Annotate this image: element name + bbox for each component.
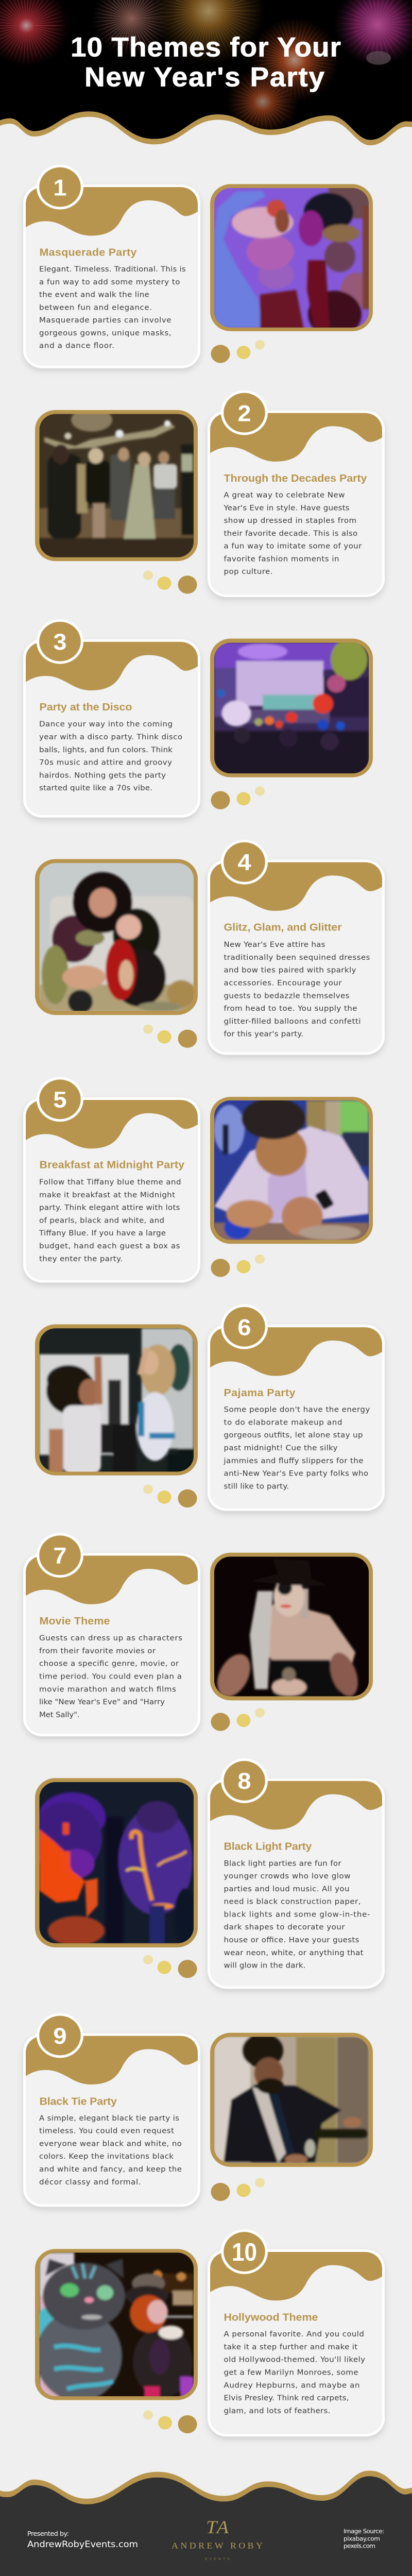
body text 9: colors. Keep the invitations black [39, 2153, 174, 2161]
body text 4: guests to bedazzle themselves [224, 992, 350, 1000]
body text 3: year with a disco party. Think disco [39, 733, 182, 741]
body text 10: glam, and lots of feathers. [224, 2406, 330, 2415]
body text 2: pop culture. [224, 567, 273, 576]
panel: theme 9 [23, 2013, 373, 2207]
body text 1: a fun way to add some mystery to [39, 278, 180, 286]
body text 8: wear neon, white, or anything that [224, 1948, 364, 1957]
number badge 5: 5 [53, 1087, 67, 1112]
number badge 2: 2 [237, 400, 251, 426]
photo: man pouring champagne [210, 2033, 373, 2167]
body text 8: will glow in the dark. [224, 1961, 306, 1970]
heading 8: Black Light Party [224, 1841, 312, 1853]
image source: pexels.com [344, 2543, 375, 2550]
body text 9: everyone wear black and white, no [39, 2140, 182, 2148]
heading 2: Through the Decades Party [224, 472, 367, 484]
heading 4: Glitz, Glam, and Glitter [224, 922, 341, 933]
footer [0, 2470, 412, 2576]
heading 10: Hollywood Theme [224, 2312, 318, 2323]
body text 2 [223, 491, 362, 576]
body text 7 [39, 1634, 182, 1719]
body text 8: dark shapes to decorate your [224, 1923, 345, 1931]
body text 1: Masquerade parties can involve [39, 316, 171, 325]
body text 1 [39, 265, 186, 350]
panel: theme 3 [23, 619, 373, 818]
title: 10 Themes for Your [71, 32, 341, 62]
number badge 4: 4 [237, 849, 251, 875]
body text 5: make it breakfast at the Midnight [39, 1191, 175, 1199]
card 9 [23, 2033, 200, 2207]
heading 6: Pajama Party [224, 1387, 296, 1399]
body text 10 [224, 2330, 365, 2415]
body text 2: favorite fashion moments in [224, 555, 339, 563]
body text 8: black lights and some glow-in-the- [224, 1910, 370, 1919]
body text 8: need is black construction paper, [224, 1897, 360, 1906]
card 7 [23, 1553, 200, 1736]
body text 7: choose a specific genre, movie, or [39, 1659, 179, 1668]
panel: theme 8 [30, 1758, 385, 1989]
card 5 [23, 1097, 200, 1283]
body text 6: gorgeous outfits, let alone stay up [224, 1431, 363, 1439]
body text 3: started quite like a 70s vibe. [39, 784, 152, 792]
logo: Andrew Roby Events [171, 2517, 263, 2561]
panel: theme 10 [35, 2229, 385, 2436]
icon: magenta firework [333, 0, 412, 67]
image source: Image Source: [344, 2528, 384, 2535]
heading 1: Masquerade Party [39, 247, 137, 258]
image source [344, 2528, 384, 2550]
panel: theme 7 [23, 1533, 373, 1736]
title [71, 32, 341, 92]
card 4 [208, 860, 385, 1055]
photo: disco stage [210, 639, 373, 777]
photo: cheshire cat and mad hatter [35, 2249, 198, 2401]
number badge 6 [221, 1304, 268, 1349]
body text 4 [224, 940, 370, 1039]
body text 7: time period. You could even plan a [39, 1672, 182, 1681]
body text 6: to do elaborate makeup and [224, 1418, 342, 1427]
card 3 [23, 639, 200, 818]
body text 3: balls, lights, and fun colors. Think [39, 745, 173, 754]
logo: Andrew Roby Events: TA [206, 2517, 229, 2538]
footer wave band [0, 2470, 412, 2576]
body text 3: 70s music and attire and groovy [39, 758, 172, 767]
body text 9: décor classy and formal. [39, 2178, 141, 2187]
panel: theme 6 [35, 1304, 385, 1511]
body text 4: accessories. Encourage your [224, 979, 342, 987]
photo: masquerade [210, 184, 373, 338]
body text 1: the event and walk the line [39, 291, 149, 299]
panel: theme 4 [35, 840, 385, 1055]
body text 1: Elegant. Timeless. Traditional. This is [39, 265, 186, 274]
body text 10: take it a step further and make it [224, 2343, 357, 2351]
body text 6: Some people don't have the energy [224, 1405, 370, 1414]
body text 1: gorgeous gowns, unique masks, [39, 329, 171, 337]
body text 5 [39, 1178, 181, 1263]
body text 6 [223, 1405, 370, 1490]
photo: dancing at the tent [35, 408, 198, 561]
card 2 [208, 411, 385, 597]
body text 7: from their favorite movies or [39, 1647, 156, 1655]
body text 6: jammies and fluffy slippers for the [223, 1456, 364, 1465]
body text 7: movie marathon and watch films [39, 1685, 176, 1693]
body text 6: anti-New Year's Eve party folks who [224, 1469, 368, 1478]
number badge 3 [37, 619, 83, 664]
body text 4: from head to toe. You supply the [224, 1004, 357, 1013]
logo: Andrew Roby Events: ANDREW ROBY [171, 2540, 263, 2551]
number badge 4 [221, 840, 268, 885]
heading 5: Breakfast at Midnight Party [39, 1159, 184, 1171]
photo: glitter friends [35, 859, 198, 1015]
dots 5 [211, 1255, 265, 1277]
dots 9 [211, 2178, 265, 2201]
body text 8: younger crowds who love glow [224, 1872, 351, 1880]
body text 10: Elvis Presley. Think red carpets, [224, 2394, 349, 2402]
body text 2: show up dressed in staples from [224, 516, 356, 525]
card 1 [23, 184, 200, 368]
dots 3 [211, 786, 265, 809]
panel: theme 2 [35, 391, 385, 597]
body text 1: and a dance floor. [39, 342, 114, 350]
number badge 7 [37, 1533, 83, 1578]
body text 5: Follow that Tiffany blue theme and [39, 1178, 181, 1187]
number badge 10: 10 [232, 2238, 257, 2266]
number badge 6: 6 [237, 1314, 251, 1340]
body text 5: they enter the party. [39, 1255, 123, 1263]
number badge 1: 1 [53, 174, 67, 200]
header gold wave band [0, 111, 412, 145]
number badge 2 [221, 391, 268, 435]
body text 6: past midnight! Cue the silky [224, 1444, 338, 1452]
body text 9 [39, 2114, 182, 2187]
body text 3: hairdos. Nothing gets the party [39, 771, 166, 779]
dots 10 [143, 2410, 197, 2433]
photo: neon face paint [30, 1778, 198, 1947]
number badge 5 [37, 1077, 83, 1122]
body text 8: Black light parties are fun for [224, 1859, 341, 1868]
body text 7: like "New Year's Eve" and "Harry [39, 1698, 165, 1706]
body text 1: between fun and elegance. [39, 303, 152, 312]
body text 7: Met Sally". [39, 1710, 80, 1719]
title: New Year's Party [84, 62, 324, 92]
body text 4: for this year's party. [224, 1030, 303, 1039]
body text 2: a fun way to imitate some of your [224, 542, 362, 551]
photo: pajama friends [35, 1325, 198, 1476]
body text 2: Year's Eve in style. Have guests [223, 504, 350, 512]
presented by: AndrewRobyEvents.com [27, 2540, 138, 2550]
number badge 8 [221, 1758, 268, 1803]
body text 4: and bow ties paired with sparkly [224, 966, 356, 975]
dots 8 [143, 1955, 197, 1978]
number badge 3: 3 [53, 629, 67, 655]
body text 4: glitter-filled balloons and confetti [224, 1017, 360, 1026]
body text 8: parties and loud music. All you [224, 1885, 349, 1893]
header banner with fireworks [0, 0, 412, 140]
number badge 9: 9 [53, 2023, 67, 2049]
logo: Andrew Roby Events: EVENTS [205, 2557, 230, 2561]
number badge 9 [37, 2013, 83, 2058]
heading 7: Movie Theme [39, 1615, 110, 1627]
dots 1 [211, 340, 265, 363]
number badge 8: 8 [237, 1768, 251, 1794]
card 10 [208, 2249, 385, 2436]
icon: rose firework [94, 0, 168, 55]
body text 5: party. Think elegant attire with lots [39, 1204, 180, 1212]
number badge 7: 7 [53, 1543, 67, 1568]
body text 7: Guests can dress up as characters [39, 1634, 182, 1642]
body text 10: get a few Marilyn Monroes, some [224, 2368, 358, 2377]
dots 2 [143, 571, 197, 594]
body text 2: A great way to celebrate New [224, 491, 345, 499]
photo: pirate costume [210, 1553, 373, 1702]
body text 3 [39, 720, 182, 792]
heading 3: Party at the Disco [39, 702, 132, 713]
body text 4: traditionally been sequined dresses [224, 953, 370, 962]
body text 8 [224, 1859, 370, 1970]
body text 9: and white and fancy, and keep the [39, 2165, 182, 2174]
icon: gold firework [157, 0, 261, 61]
number badge 10 [221, 2229, 268, 2274]
dots 4 [143, 1025, 197, 1048]
card 8 [208, 1778, 385, 1989]
presented by [27, 2530, 138, 2550]
body text 5: Tiffany Blue. If you have a large [39, 1229, 166, 1238]
body text 9: A simple, elegant black tie party is [39, 2114, 179, 2123]
body text 6: still like to party. [224, 1482, 289, 1490]
body text 5: budget, hand each guest a box as [39, 1242, 180, 1250]
heading 9: Black Tie Party [39, 2096, 117, 2108]
body text 10: old Hollywood-themed. You'll likely [224, 2355, 365, 2364]
card 6 [208, 1325, 385, 1511]
photo: man at breakfast [210, 1097, 373, 1244]
body text 2: their favorite decade. This is also [224, 529, 357, 538]
number badge 1 [37, 165, 83, 210]
image source: pixabay.com [344, 2535, 380, 2542]
dots 6 [143, 1485, 197, 1507]
body text 5: of pearls, black and white, and [39, 1216, 164, 1225]
dots 7 [211, 1708, 265, 1731]
panel: theme 1 [23, 165, 373, 368]
icon: red firework [0, 0, 70, 67]
presented by: Presented by: [27, 2530, 69, 2537]
icon: orange firework [229, 20, 337, 130]
body text 9: timeless. You could even request [39, 2127, 174, 2136]
panel: theme 5 [23, 1077, 373, 1283]
body text 8: house or office. Have your guests [224, 1936, 359, 1944]
body text 4: New Year's Eve attire has [224, 940, 325, 949]
body text 3: Dance your way into the coming [39, 720, 173, 728]
body text 10: A personal favorite. And you could [224, 2330, 364, 2338]
body text 10: Audrey Hepburns, and maybe an [224, 2381, 359, 2389]
